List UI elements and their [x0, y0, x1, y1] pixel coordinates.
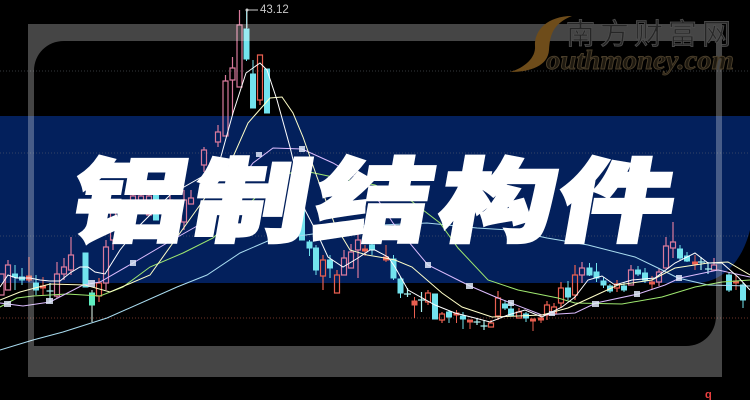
title: 件 — [549, 152, 683, 254]
moving average: lavender line — [0, 148, 750, 315]
watermark logo — [510, 16, 734, 75]
moving average: blue long-term line — [0, 223, 750, 350]
logo swoosh — [510, 16, 572, 72]
solid red small candles — [26, 245, 738, 331]
title: 制 — [185, 152, 319, 254]
title: 构 — [431, 152, 565, 254]
solid cyan falling candles — [12, 10, 746, 329]
navy title band — [0, 116, 750, 283]
moving average: green line — [0, 170, 750, 307]
title: 结 — [307, 152, 441, 254]
title — [64, 152, 683, 254]
green candle — [90, 290, 94, 322]
moving average: yellow line — [0, 97, 750, 317]
hollow rising candles, red — [96, 55, 620, 327]
peak price label: 43.12 — [260, 4, 289, 16]
logo domain: outhmoney.com — [546, 45, 734, 75]
moving average markers — [4, 146, 682, 316]
title: 铝 — [64, 152, 198, 254]
moving average: white fast line — [0, 63, 750, 322]
cross candles — [46, 257, 712, 330]
logo Chinese name: 南方财富网 — [566, 18, 731, 51]
peak price label — [246, 4, 289, 28]
hollow rising candles, pink — [0, 10, 716, 298]
